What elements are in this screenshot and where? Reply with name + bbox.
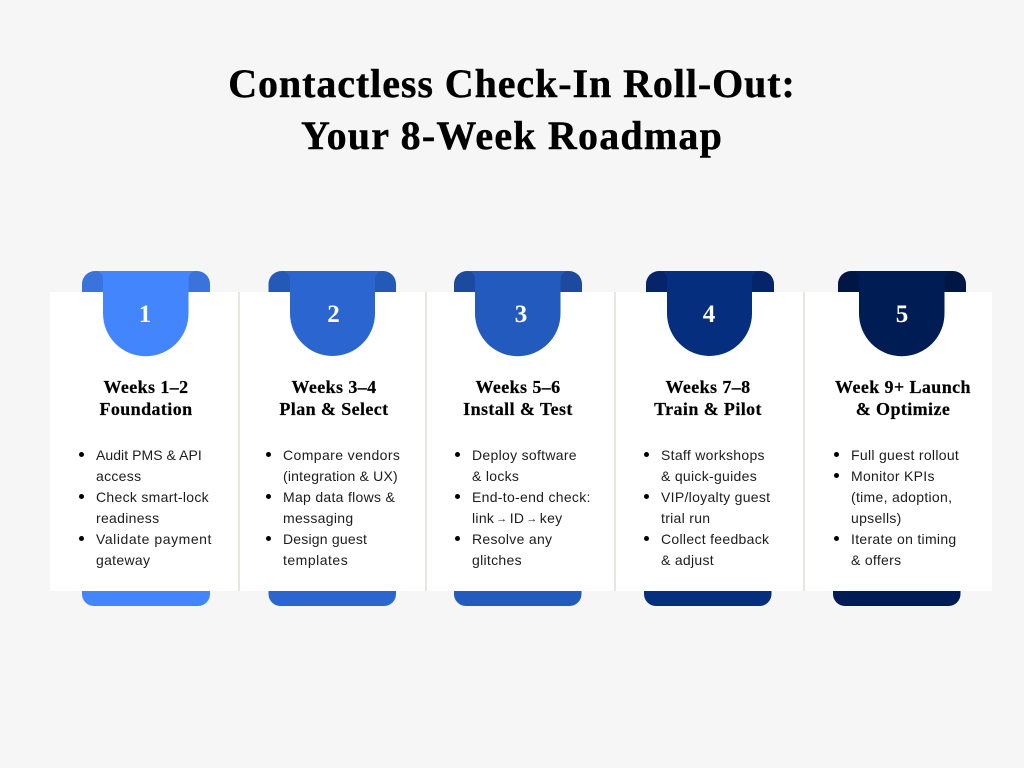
list 4: Staff workshops bbox=[661, 447, 765, 463]
list 5: upsells) bbox=[851, 510, 902, 526]
list 4: VIP/loyalty guest bbox=[661, 489, 770, 505]
list 3: glitches bbox=[472, 552, 522, 568]
list 5: Iterate on timing bbox=[851, 531, 956, 547]
card body bbox=[50, 292, 238, 591]
heading 5: & Optimize bbox=[856, 399, 950, 419]
panel: week 1-2 foundation bbox=[50, 292, 238, 591]
list 2: Compare vendors bbox=[283, 447, 400, 463]
list 3: Deploy software bbox=[472, 447, 577, 463]
card body bbox=[240, 292, 425, 591]
list 2 bbox=[266, 447, 400, 568]
number 3: 3 bbox=[515, 301, 527, 328]
list 2: Map data flows & bbox=[283, 489, 395, 505]
list 1: access bbox=[96, 468, 141, 484]
heading 5: Week 9+ Launch bbox=[835, 377, 971, 397]
panel: week 9 launch and optimize bbox=[805, 292, 992, 591]
heading 2 bbox=[279, 377, 389, 419]
list 2: messaging bbox=[283, 510, 353, 526]
heading 1 bbox=[99, 377, 193, 419]
list 3: link → ID → key bbox=[472, 510, 562, 526]
list 4: trial run bbox=[661, 510, 710, 526]
list 4: & adjust bbox=[661, 552, 714, 568]
heading 3 bbox=[463, 377, 573, 419]
list 1: Validate payment bbox=[96, 531, 212, 547]
list 2: templates bbox=[283, 552, 348, 568]
panel: week 3-4 plan and select bbox=[240, 292, 425, 591]
list 5: & offers bbox=[851, 552, 901, 568]
card body bbox=[616, 292, 803, 591]
heading 3: Install & Test bbox=[463, 399, 573, 419]
number 1: 1 bbox=[139, 301, 151, 328]
list 4: & quick-guides bbox=[661, 468, 757, 484]
list 3: & locks bbox=[472, 468, 519, 484]
heading 3: Weeks 5–6 bbox=[475, 377, 561, 397]
list 1: readiness bbox=[96, 510, 159, 526]
panel: week 5-6 install and test bbox=[427, 292, 614, 591]
list 5: Monitor KPIs bbox=[851, 468, 935, 484]
heading 2: Plan & Select bbox=[279, 399, 389, 419]
heading 1: Weeks 1–2 bbox=[103, 377, 189, 397]
heading 4 bbox=[654, 377, 762, 419]
list 3: Resolve any bbox=[472, 531, 552, 547]
panel: week 7-8 train and pilot bbox=[616, 292, 803, 591]
heading 4: Train & Pilot bbox=[654, 399, 762, 419]
list 5: Full guest rollout bbox=[851, 447, 959, 463]
heading 2: Weeks 3–4 bbox=[291, 377, 377, 397]
list 2: Design guest bbox=[283, 531, 367, 547]
list 5 bbox=[834, 447, 959, 568]
number 4: 4 bbox=[703, 301, 715, 328]
list 1 bbox=[79, 447, 212, 568]
list 1: Check smart-lock bbox=[96, 489, 209, 505]
list 3: End-to-end check: bbox=[472, 489, 591, 505]
number 5: 5 bbox=[896, 301, 908, 328]
title bbox=[228, 61, 796, 158]
list 1: Audit PMS & API bbox=[96, 447, 202, 463]
heading 5 bbox=[835, 377, 971, 420]
list 4: Collect feedback bbox=[661, 531, 769, 547]
title: Your 8-Week Roadmap bbox=[301, 113, 723, 158]
list 1: gateway bbox=[96, 552, 150, 568]
card body bbox=[805, 292, 992, 591]
list 4 bbox=[644, 447, 770, 568]
number 2: 2 bbox=[327, 301, 340, 328]
list 5: (time, adoption, bbox=[851, 489, 952, 505]
title: Contactless Check-In Roll-Out: bbox=[228, 61, 796, 106]
list 3 bbox=[455, 447, 591, 568]
list 2: (integration & UX) bbox=[283, 468, 398, 484]
heading 4: Weeks 7–8 bbox=[665, 377, 751, 397]
card body bbox=[427, 292, 614, 591]
heading 1: Foundation bbox=[99, 399, 193, 419]
